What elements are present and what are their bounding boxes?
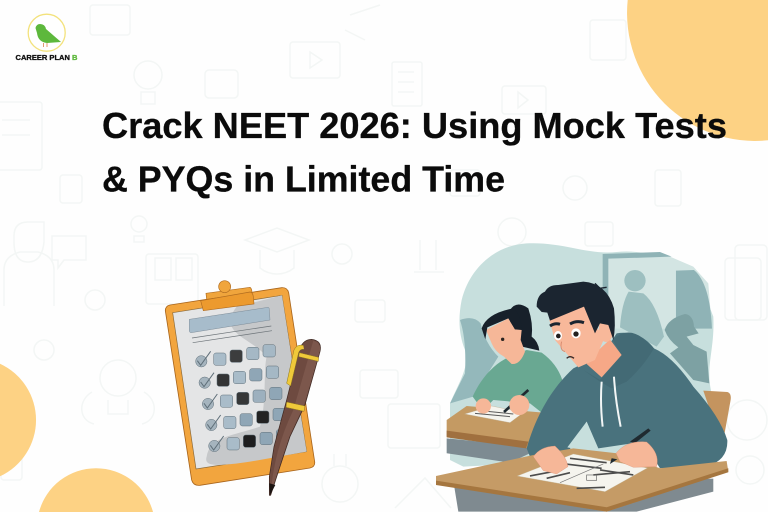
clip (206, 287, 252, 299)
icon: clipboard with pen (165, 281, 321, 495)
icon: bird in circle (28, 14, 65, 51)
logo (16, 14, 78, 62)
eyes and mouth (554, 331, 562, 340)
gap under arm (567, 422, 598, 450)
illustration: students taking exam (436, 243, 731, 512)
title (102, 105, 727, 200)
neck and face (587, 339, 622, 377)
hair (537, 282, 615, 340)
girl student (473, 305, 562, 413)
title: Crack NEET 2026: Using Mock Tests (102, 105, 727, 146)
decorative circle: left (0, 364, 36, 476)
pen tip (610, 458, 617, 464)
hands (533, 446, 568, 474)
background window and silhouettes (450, 252, 712, 403)
clipboard board (165, 288, 315, 485)
title: & PYQs in Limited Time (102, 158, 505, 200)
logo wordmark: CAREER PLAN B (16, 53, 78, 62)
boy student (527, 282, 727, 468)
decorative circle: top right (627, 0, 768, 141)
front desk (436, 428, 728, 512)
answer rows (196, 345, 289, 452)
header box (189, 307, 270, 333)
exam paper (517, 454, 647, 492)
hoodie (527, 333, 727, 468)
answer sheet (173, 295, 307, 469)
back desk with exam paper (447, 390, 543, 463)
pen (269, 339, 321, 495)
pen upper part (630, 428, 651, 443)
chair back (703, 391, 731, 437)
background blob (450, 243, 717, 467)
decorative circle: bottom left (39, 468, 153, 512)
